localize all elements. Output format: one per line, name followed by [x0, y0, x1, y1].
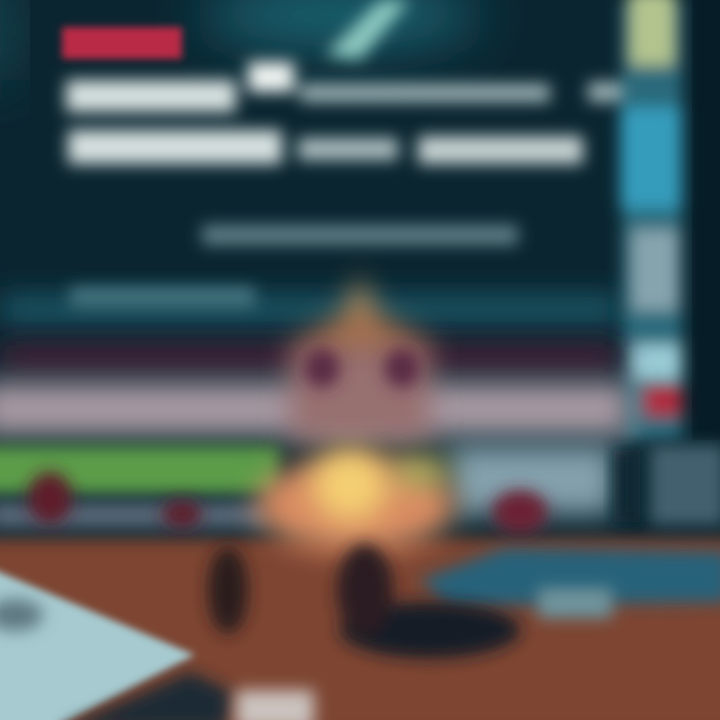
top teal glow — [200, 0, 480, 47]
right pan — [384, 348, 420, 388]
outer glow — [255, 457, 455, 553]
dark pillar right — [614, 450, 640, 522]
column light block — [632, 345, 682, 379]
fire glow — [255, 449, 455, 553]
trophy body — [290, 350, 430, 440]
column blue block — [620, 108, 682, 208]
trophy beam — [285, 305, 440, 348]
trophy scale — [285, 275, 440, 440]
trophy pans — [304, 348, 420, 388]
pale device highlight — [538, 588, 612, 618]
green tint — [390, 458, 450, 486]
left pan — [304, 348, 340, 388]
teal horizontal band — [0, 296, 620, 322]
right column — [620, 0, 682, 440]
white foreground cup — [236, 690, 314, 720]
subtitle text — [202, 225, 518, 245]
column red block — [644, 386, 682, 416]
column pale block — [632, 230, 678, 310]
stands — [0, 345, 630, 436]
title text lines — [66, 62, 648, 164]
dark foreground object — [337, 544, 520, 658]
dark foreground bar — [60, 672, 232, 720]
maroon stand row — [0, 345, 620, 369]
paper sheet — [0, 568, 195, 720]
teal device — [420, 548, 720, 606]
paper emblem — [0, 599, 43, 631]
left corner glow — [0, 0, 10, 80]
green field — [0, 446, 280, 494]
trophy tip — [340, 275, 380, 325]
wooden table — [0, 538, 720, 720]
dark hand silhouette — [208, 546, 248, 634]
column yellow top — [630, 0, 674, 65]
inner flame — [312, 449, 388, 521]
small band caption — [70, 287, 255, 307]
left spectators strip — [0, 502, 270, 528]
light beam — [325, 0, 410, 60]
red figure middle — [162, 500, 202, 528]
right stand grey — [650, 445, 720, 525]
red title tag — [62, 27, 182, 59]
red figure left — [28, 472, 72, 524]
right dark edge — [692, 0, 720, 440]
pale crowd — [0, 382, 630, 436]
field right side — [450, 445, 615, 515]
red figure right — [492, 490, 548, 534]
column base — [622, 0, 682, 440]
